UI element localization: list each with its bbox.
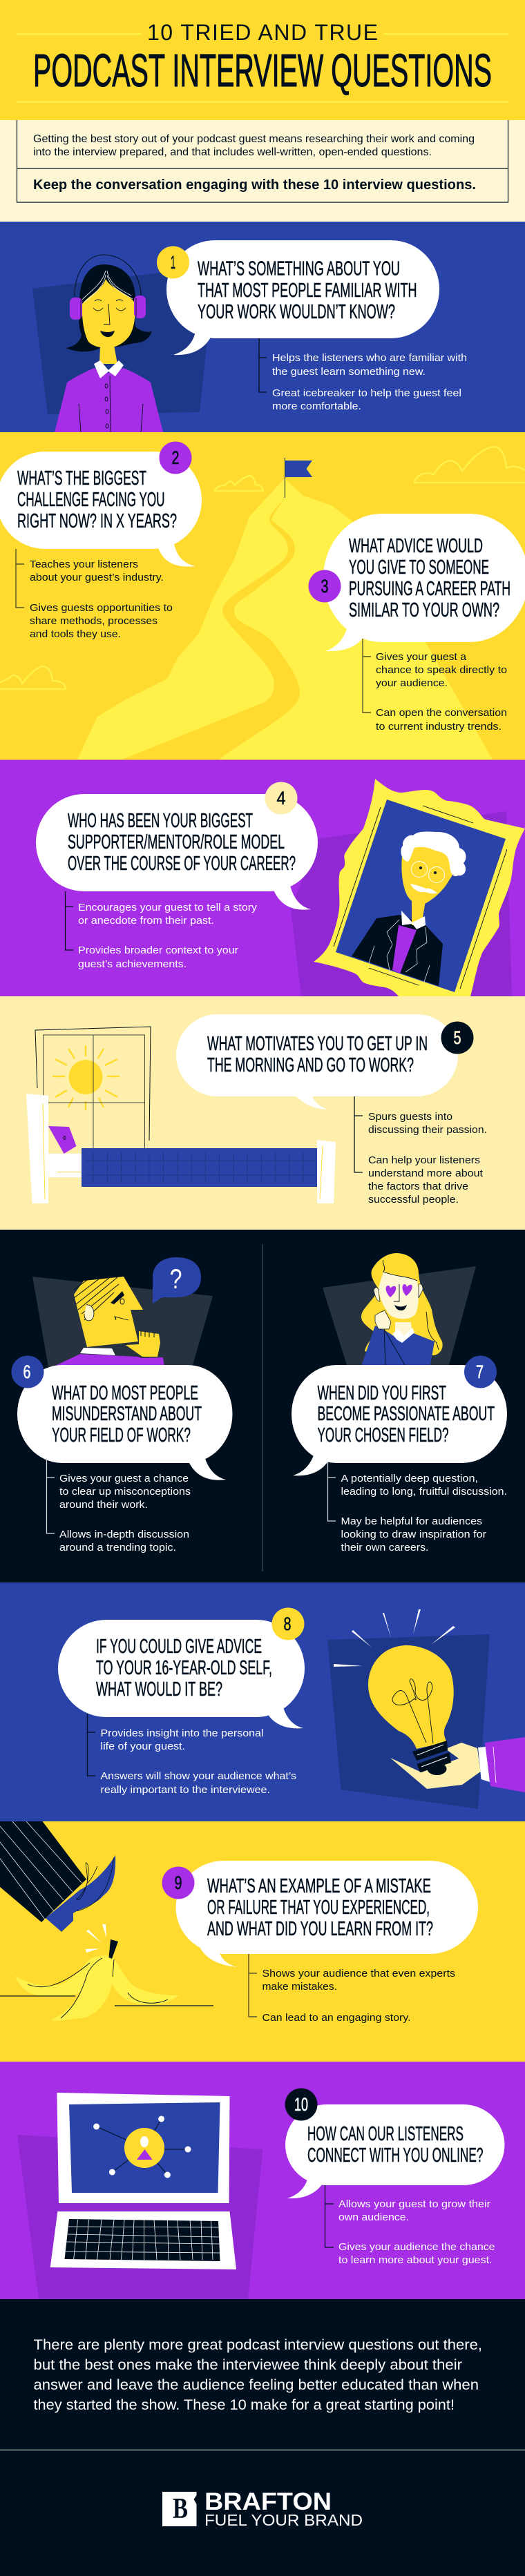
speech bubble 3 — [323, 514, 525, 651]
number badge 10: 10 — [294, 2094, 308, 2115]
number badge 3 — [308, 570, 341, 602]
takeaways 2 — [16, 549, 173, 640]
logo: Brafton: FUEL YOUR BRAND — [204, 2511, 363, 2529]
intro panel: into the interview prepared, and that includes well-written, open-ended questions. — [33, 146, 432, 158]
takeaways 8: Provides insight into the personal — [101, 1727, 264, 1739]
takeaways 4: guest’s achievements. — [78, 958, 187, 970]
speech bubble 2 — [0, 452, 202, 567]
section 4 — [0, 759, 525, 996]
takeaways 6 — [47, 1460, 191, 1553]
number badge 4 — [265, 782, 297, 815]
speech bubble 2: CHALLENGE FACING YOU — [17, 489, 164, 511]
illustration: woman with heart eyes — [361, 1253, 443, 1365]
section 1 — [0, 222, 525, 432]
takeaways 6: Allows in-depth discussion — [59, 1529, 189, 1540]
takeaways 7 — [327, 1462, 507, 1553]
takeaways 5: understand more about — [368, 1168, 484, 1179]
intro text: Getting the best story out of your podcast guest means researching their work and coming — [33, 133, 475, 145]
takeaways 1: Helps the listeners who are familiar with — [272, 352, 467, 364]
number badge 10 — [285, 2088, 318, 2121]
speech bubble 8: IF YOU COULD GIVE ADVICE — [96, 1636, 262, 1658]
illustration: thinking man — [55, 1277, 164, 1368]
takeaways 3: your audience. — [376, 677, 448, 689]
number badge 4: 4 — [276, 788, 286, 808]
takeaways 2: about your guest’s industry. — [30, 572, 164, 583]
number badge 5: 5 — [453, 1027, 461, 1048]
illustration: light bulb in hand — [334, 1609, 525, 1792]
illustration: portrait in frame — [314, 779, 525, 996]
illustration: banana peel — [0, 1924, 213, 2021]
takeaways 1: more comfortable. — [272, 400, 361, 412]
speech bubble 6: MISUNDERSTAND ABOUT — [52, 1403, 202, 1425]
speech bubble 6: WHAT DO MOST PEOPLE — [52, 1382, 198, 1404]
section 5 — [0, 996, 525, 1230]
takeaways 4 — [65, 891, 258, 970]
takeaways 2: Teaches your listeners — [30, 559, 138, 570]
speech bubble 5 — [176, 1014, 458, 1110]
takeaways 10: Allows your guest to grow their — [338, 2198, 490, 2210]
takeaways 8: really important to the interviewee. — [101, 1784, 270, 1796]
icon: question bubble: ? — [170, 1264, 182, 1295]
takeaways 7: A potentially deep question, — [341, 1473, 478, 1484]
takeaways 10: own audience. — [338, 2211, 409, 2223]
closing text: answer and leave the audience feeling better educated than when — [33, 2377, 479, 2393]
number badge 2 — [159, 442, 192, 474]
intro panel — [0, 120, 525, 222]
takeaways 3 — [363, 639, 507, 733]
takeaways 5: Can help your listeners — [368, 1154, 480, 1166]
takeaways 3: Can open the conversation — [376, 707, 507, 719]
closing text: they started the show. These 10 make for a great starting point! — [33, 2397, 455, 2413]
takeaways 3: chance to speak directly to — [376, 664, 507, 676]
section 2 and 3 — [0, 432, 525, 760]
takeaways 8: Answers will show your audience what’s — [101, 1770, 296, 1782]
takeaways 7: leading to long, fruitful discussion. — [341, 1486, 507, 1498]
takeaways 2: share methods, processes — [30, 615, 158, 627]
number badge 6 — [11, 1356, 44, 1388]
speech bubble 4: OVER THE COURSE OF YOUR CAREER? — [68, 853, 296, 875]
takeaways 9: Can lead to an engaging story. — [262, 2012, 410, 2024]
takeaways 1: Great icebreaker to help the guest feel — [272, 387, 461, 399]
speech bubble 6: YOUR FIELD OF WORK? — [52, 1424, 191, 1446]
section 6 and 7 — [0, 1230, 525, 1582]
takeaways 8: life of your guest. — [101, 1741, 185, 1752]
logo: Brafton: BRAFTON — [204, 2488, 332, 2515]
speech bubble 7 — [292, 1365, 507, 1475]
speech bubble 10 — [285, 2104, 504, 2198]
takeaways 1: the guest learn something new. — [272, 366, 426, 378]
takeaways 10 — [325, 2185, 495, 2266]
intro callout: Keep the conversation engaging with these 10 interview questions. — [33, 177, 476, 193]
takeaways 7: May be helpful for audiences — [341, 1515, 482, 1527]
takeaways 3: Gives your guest a — [376, 651, 467, 663]
takeaways 4: or anecdote from their past. — [78, 915, 214, 927]
speech bubble 1: YOUR WORK WOULDN’T KNOW? — [198, 301, 395, 323]
logo: Brafton: B — [173, 2493, 188, 2525]
illustration: mountain — [0, 447, 525, 759]
icon: sun — [52, 1045, 120, 1110]
number badge 1: 1 — [171, 252, 175, 273]
closing text — [33, 2337, 482, 2413]
section 8 — [0, 1582, 525, 1821]
takeaways 7: their own careers. — [341, 1542, 428, 1553]
illustration: laptop — [50, 2093, 236, 2269]
header — [0, 0, 525, 120]
speech bubble 1 — [166, 240, 439, 355]
takeaways 4: Provides broader context to your — [78, 945, 238, 956]
illustration: slipping shoe — [0, 1821, 115, 1932]
number badge 7 — [464, 1356, 497, 1388]
takeaways 2: Gives guests opportunities to — [30, 602, 173, 614]
speech bubble 6 — [17, 1365, 232, 1480]
takeaways 5: Spurs guests into — [368, 1111, 452, 1123]
number badge 6: 6 — [23, 1362, 30, 1382]
takeaways 10: to learn more about your guest. — [338, 2254, 492, 2266]
speech bubble 4 — [36, 794, 318, 910]
icon: question bubble — [153, 1257, 201, 1304]
section 10 — [0, 2062, 525, 2299]
number badge 1 — [157, 246, 189, 279]
speech bubble 4: WHO HAS BEEN YOUR BIGGEST — [68, 810, 253, 832]
takeaways 6: around a trending topic. — [59, 1542, 176, 1553]
icon: flag — [285, 458, 312, 498]
speech bubble 7: WHEN DID YOU FIRST — [318, 1382, 446, 1404]
section 9 — [0, 1821, 525, 2062]
takeaways 5: discussing their passion. — [368, 1124, 487, 1136]
takeaways 6: to clear up misconceptions — [59, 1486, 191, 1498]
takeaways 9: make mistakes. — [262, 1981, 337, 1993]
takeaways 6: around their work. — [59, 1499, 148, 1511]
number badge 8: 8 — [283, 1614, 292, 1634]
speech bubble 1: WHAT’S SOMETHING ABOUT YOU — [198, 258, 400, 280]
speech bubble 9 — [176, 1861, 478, 1967]
speech bubble 8: TO YOUR 16-YEAR-OLD SELF, — [96, 1657, 272, 1679]
eyebrow title: 10 TRIED AND TRUE — [147, 20, 378, 45]
number badge 9 — [162, 1867, 195, 1899]
footer — [0, 2299, 525, 2576]
closing text: There are plenty more great podcast interview questions out there, — [33, 2337, 482, 2353]
number badge 7: 7 — [476, 1362, 484, 1382]
takeaways 10: Gives your audience the chance — [338, 2241, 495, 2253]
number badge 3: 3 — [321, 576, 329, 597]
number badge 5 — [441, 1022, 474, 1054]
illustration: bed and window — [26, 1027, 336, 1203]
number badge 8 — [272, 1607, 304, 1640]
takeaways 7: looking to draw inspiration for — [341, 1529, 486, 1540]
illustration: woman with headphones — [55, 255, 163, 432]
takeaways 5: successful people. — [368, 1194, 459, 1205]
takeaways 8 — [87, 1714, 296, 1796]
closing text: but the best ones make the interviewee think deeply about their — [33, 2357, 462, 2373]
takeaways 1 — [259, 338, 467, 412]
takeaways 6: Gives your guest a chance — [59, 1473, 189, 1484]
takeaways 2: and tools they use. — [30, 628, 121, 640]
speech bubble 4: SUPPORTER/MENTOR/ROLE MODEL — [68, 831, 285, 853]
takeaways 3: to current industry trends. — [376, 721, 502, 733]
takeaways 9 — [249, 1954, 455, 2024]
speech bubble 8 — [58, 1620, 305, 1728]
speech bubble 8: WHAT WOULD IT BE? — [96, 1678, 222, 1701]
number badge 9: 9 — [174, 1872, 182, 1893]
number badge 2: 2 — [171, 447, 180, 468]
speech bubble 2: RIGHT NOW? IN X YEARS? — [17, 510, 177, 532]
takeaways 5 — [354, 1096, 487, 1205]
speech bubble 2: WHAT’S THE BIGGEST — [17, 467, 146, 490]
takeaways 4: Encourages your guest to tell a story — [78, 902, 258, 913]
takeaways 9: Shows your audience that even experts — [262, 1968, 455, 1979]
takeaways 5: the factors that drive — [368, 1181, 468, 1192]
logo: Brafton — [162, 2488, 363, 2529]
